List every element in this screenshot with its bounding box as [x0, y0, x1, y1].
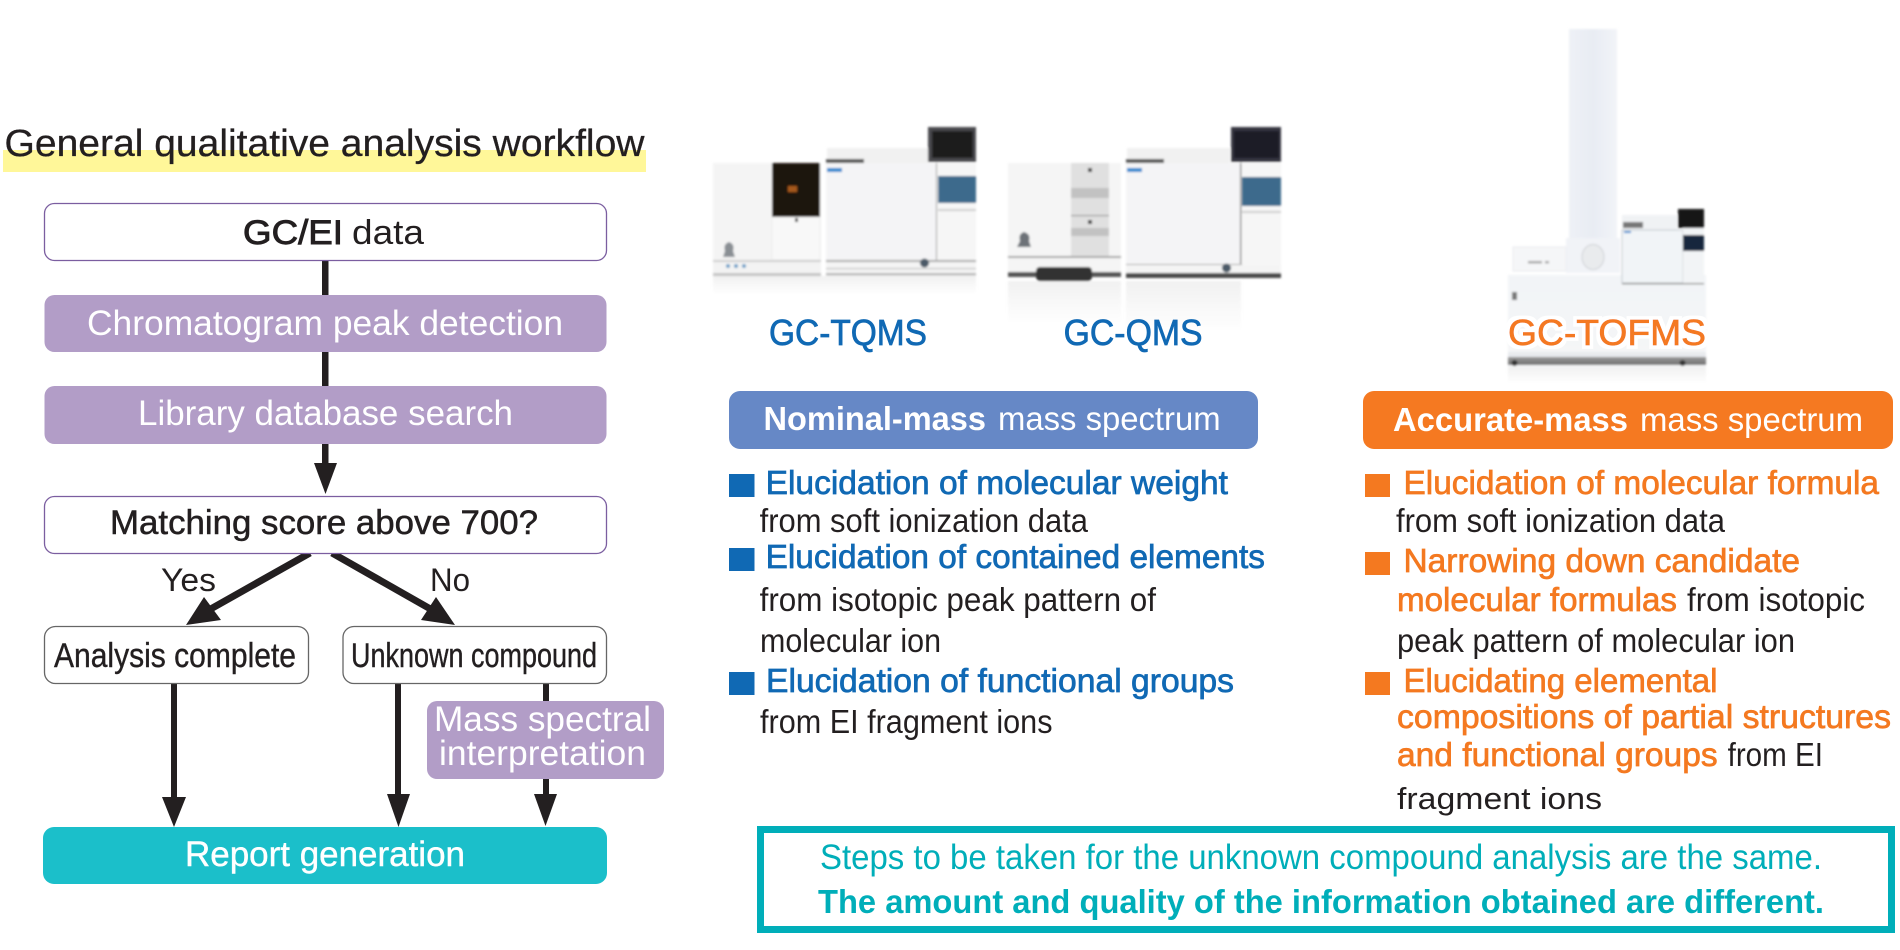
arrow: no branch — [332, 553, 455, 625]
instrument: GC-QMS — [1008, 127, 1281, 353]
instrument label: GC-TOFMS: GC-TOFMS — [1508, 312, 1706, 353]
instrument: GC-TQMS — [713, 127, 976, 353]
decision: matching score — [44, 496, 606, 554]
decision: matching score: Matching score above 700? — [110, 504, 538, 542]
item: elemental compositions — [1365, 662, 1891, 816]
step: GC/EI data: GC/EI — [243, 214, 343, 252]
header: accurate-mass mass spectrum: Accurate-mass — [1393, 401, 1628, 438]
item: elemental compositions: from EI — [1728, 736, 1823, 773]
step: GC/EI data: data — [352, 214, 424, 252]
step: mass spectral interpretation: Mass spectral — [434, 700, 651, 739]
header: nominal-mass mass spectrum: mass spectrum — [998, 400, 1221, 437]
item: contained elements: molecular ion — [760, 622, 941, 659]
item: elemental compositions: compositions of partial structures — [1397, 698, 1891, 735]
arrow: unknown compound via interpretation to report — [534, 683, 557, 826]
callout: conclusion: The amount and quality of the information obtained are different. — [818, 883, 1824, 920]
item: contained elements — [729, 538, 1265, 659]
item: candidate molecular formulas: Narrowing down candidate — [1404, 542, 1800, 579]
step: mass spectral interpretation: interpretation — [439, 734, 646, 773]
panel: accurate-mass mass spectrum — [1363, 391, 1893, 816]
header: accurate-mass mass spectrum — [1363, 391, 1893, 449]
result: analysis complete — [44, 626, 308, 684]
item: molecular weight — [729, 464, 1228, 539]
header: accurate-mass mass spectrum: mass spectrum — [1640, 401, 1863, 438]
step: report generation: Report generation — [185, 835, 465, 874]
step: chromatogram peak detection — [44, 295, 606, 352]
step: report generation — [43, 827, 607, 884]
item: contained elements: Elucidation of contained elements — [766, 538, 1265, 575]
item: elemental compositions: fragment ions — [1397, 781, 1602, 816]
step: GC/EI data — [44, 204, 606, 260]
header: nominal-mass mass spectrum: Nominal-mass — [764, 400, 986, 437]
panel: nominal-mass mass spectrum — [729, 391, 1265, 740]
step: library database search — [44, 386, 606, 444]
arrow: data to library search to matching score — [314, 260, 337, 494]
step: mass spectral interpretation — [427, 700, 664, 779]
item: molecular formula: Elucidation of molecular formula — [1404, 464, 1880, 501]
result: unknown compound — [343, 626, 606, 684]
instrument: GC-TOFMS — [1508, 29, 1706, 384]
result: analysis complete: Analysis complete — [54, 637, 296, 675]
item: elemental compositions: Elucidating elemental — [1404, 662, 1718, 699]
flowchart: general qualitative analysis workflow — [43, 204, 664, 884]
label: no: No — [430, 562, 470, 598]
item: functional groups — [729, 662, 1234, 740]
item: functional groups: from EI fragment ions — [760, 703, 1052, 740]
arrow: yes branch — [186, 553, 310, 625]
arrow: unknown compound to report — [387, 684, 410, 827]
label: yes: Yes — [161, 562, 216, 598]
title: General qualitative analysis workflow — [4, 123, 645, 165]
callout: conclusion: Steps to be taken for the unknown compound analysis are the same. — [820, 838, 1822, 877]
item: molecular weight: Elucidation of molecular weight — [766, 464, 1228, 501]
instrument label: GC-QMS: GC-QMS — [1064, 312, 1203, 353]
instrument label: GC-TQMS: GC-TQMS — [769, 312, 927, 353]
item: elemental compositions: and functional groups — [1397, 736, 1718, 773]
item: contained elements: from isotopic peak pattern of — [760, 581, 1157, 618]
header: nominal-mass mass spectrum — [729, 391, 1258, 449]
step: library database search: Library database search — [138, 394, 513, 433]
arrow: analysis complete to report — [162, 683, 186, 827]
result: unknown compound: Unknown compound — [351, 637, 597, 675]
item: candidate molecular formulas: molecular formulas — [1397, 581, 1677, 618]
item: molecular formula: from soft ionization data — [1396, 502, 1726, 539]
step: chromatogram peak detection: Chromatogram peak detection — [87, 304, 563, 343]
item: molecular formula — [1365, 464, 1880, 539]
item: candidate molecular formulas — [1365, 542, 1865, 659]
callout: conclusion — [760, 830, 1892, 930]
item: candidate molecular formulas: peak pattern of molecular ion — [1397, 622, 1795, 659]
item: functional groups: Elucidation of functional groups — [766, 662, 1234, 699]
item: molecular weight: from soft ionization data — [760, 502, 1089, 539]
item: candidate molecular formulas: from isotopic — [1687, 581, 1865, 618]
